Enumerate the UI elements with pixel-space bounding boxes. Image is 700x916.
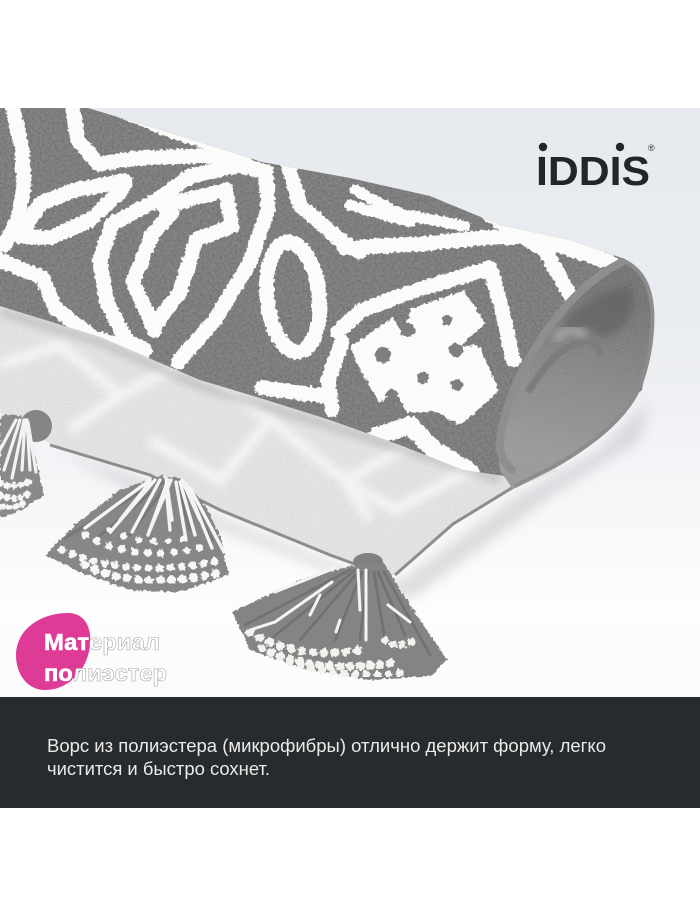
tassel 3 knot: [353, 553, 383, 567]
tassel 2 strands: [45, 476, 228, 592]
shadow below roll: [0, 312, 500, 480]
bound edge rim: [500, 262, 622, 470]
underside stitched edge: [50, 445, 515, 575]
caption text: чистится и быстро сохнет.: [47, 759, 270, 779]
photo: rolled rug with tassels: [0, 100, 700, 697]
badge heading: Материал: [44, 629, 160, 655]
tassel 3 yarn tips: [250, 632, 415, 674]
tassel 3: [232, 553, 447, 680]
rug underside cloth: [0, 300, 560, 575]
medallion grey holes: [375, 315, 463, 401]
tassel 1 tips: [0, 480, 32, 508]
caption text: Ворс из полиэстера (микрофибры) отлично держит форму, легко: [47, 736, 606, 756]
tassel 3 strands: [232, 564, 447, 680]
rug roll top surface: [0, 100, 660, 490]
logo registered mark: ®: [648, 143, 655, 153]
badge: material: [16, 613, 167, 690]
faint woven pattern on underside: [0, 345, 470, 520]
grey pile: [0, 100, 660, 490]
caption text: [47, 736, 606, 779]
logo dots: [539, 143, 547, 151]
dark caption band: [0, 697, 700, 808]
badge pink blob: [16, 613, 90, 690]
logo wordmark: IDDIS: [536, 148, 650, 194]
tassel 1 strands: [0, 414, 44, 518]
tassel 1: [0, 410, 52, 518]
tassel 1 knot: [20, 410, 52, 442]
tassel 2 yarn tips: [62, 530, 222, 581]
white pattern: [0, 105, 610, 472]
tassel 2: [45, 476, 228, 592]
photo backdrop: [0, 108, 700, 506]
badge value: полиэстер: [44, 660, 167, 686]
inner fold lip: [528, 340, 600, 392]
white medallion: [353, 293, 497, 423]
inner shadow: [565, 285, 633, 338]
roll end backing: [497, 260, 652, 488]
logo: IDDIS: [538, 142, 654, 186]
soft shadow under rug: [60, 400, 650, 600]
rolled rug end: [497, 260, 652, 488]
